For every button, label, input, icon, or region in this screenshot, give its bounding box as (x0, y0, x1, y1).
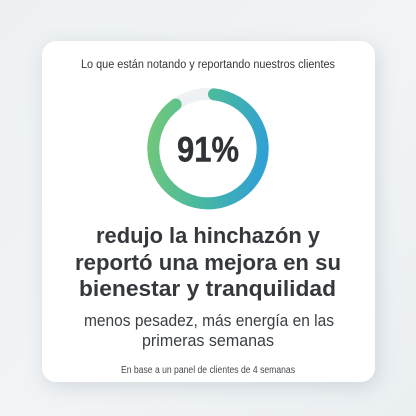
subheading: primeras semanas (142, 331, 274, 350)
headline: bienestar y tranquilidad (79, 276, 336, 301)
footnote: En base a un panel de clientes de 4 semanas (121, 365, 295, 376)
panel: white card (42, 41, 375, 382)
headline: reportó una mejora en su (75, 250, 341, 275)
subheading (84, 311, 334, 350)
headline: redujo la hinchazón y (96, 223, 320, 248)
headline (75, 223, 341, 301)
intro text: Lo que están notando y reportando nuestros clientes (81, 59, 335, 71)
subheading: menos pesadez, más energía en las (84, 311, 334, 330)
donut chart: 91% (153, 94, 263, 203)
percentage value: 91% (177, 130, 239, 170)
